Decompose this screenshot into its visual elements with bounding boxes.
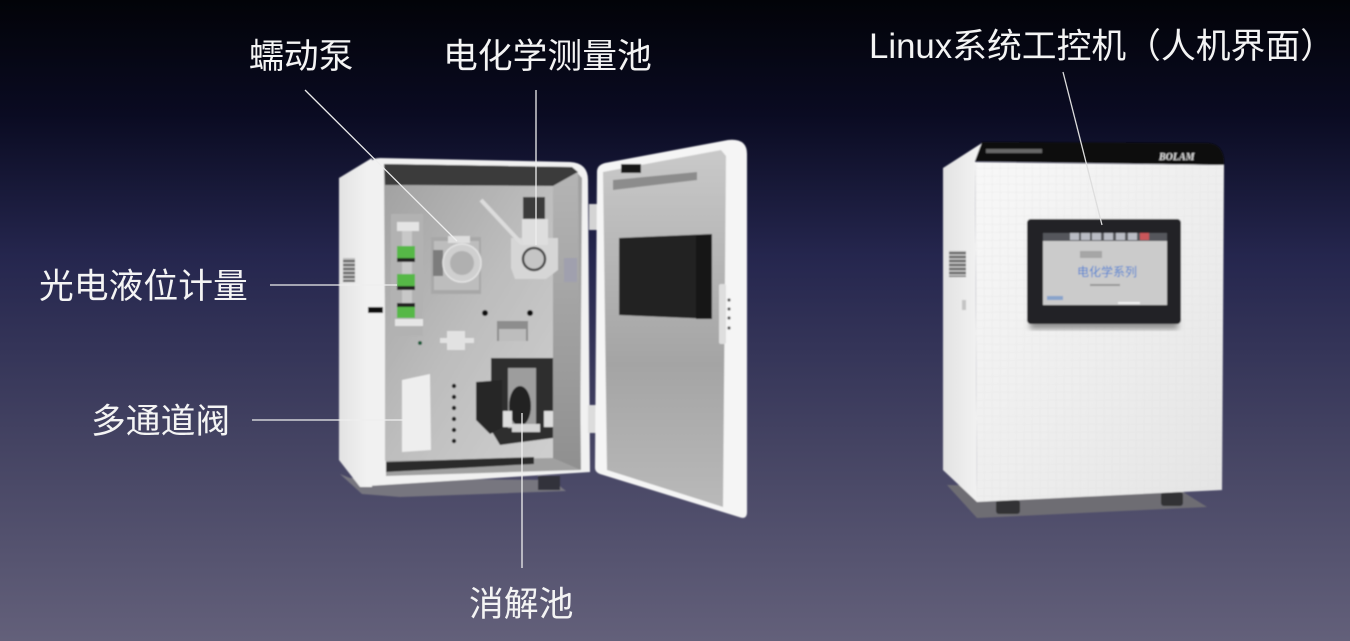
open cabinet	[339, 140, 747, 518]
label: level sensor: 光电液位计量	[39, 267, 248, 306]
cabinet interior	[384, 164, 582, 476]
green sensor 3	[397, 306, 415, 318]
leader lines	[252, 72, 1102, 568]
door latch	[621, 164, 641, 173]
closed feet	[996, 500, 1020, 514]
model text	[986, 149, 1042, 153]
level sensor column	[391, 214, 423, 336]
valve holes	[452, 384, 456, 443]
front grid texture	[975, 162, 1224, 502]
small block	[447, 331, 465, 350]
green sensor 1	[397, 246, 415, 259]
green sensor 2	[397, 274, 415, 287]
label: multi-channel valve: 多通道阀	[91, 402, 230, 441]
cabinet side panel	[339, 158, 372, 487]
touch screen	[1027, 219, 1181, 324]
rectangular cutout	[497, 321, 528, 341]
open door	[595, 140, 747, 518]
closed front panel	[975, 162, 1224, 502]
screen display	[1043, 233, 1167, 305]
door inner panel	[603, 150, 726, 507]
closed side panel	[943, 143, 982, 502]
closed latch	[962, 300, 966, 310]
screen title: 电化学系列	[1077, 264, 1137, 279]
door black box	[619, 234, 712, 319]
cabinet feet	[538, 476, 560, 490]
label: digestion cell: 消解池	[469, 585, 573, 624]
door hinge strip	[719, 284, 726, 344]
screen toolbar	[1043, 233, 1167, 241]
interior top dark band	[384, 164, 578, 186]
digestion cell	[476, 358, 553, 445]
screen shadow	[1030, 320, 1178, 329]
peristaltic pump	[431, 236, 481, 294]
vent grille	[343, 258, 355, 282]
label: Linux industrial PC: Linux系统工控机（人机界面）	[869, 27, 1335, 66]
electrochemical cell	[481, 197, 558, 279]
bottom slot	[386, 457, 534, 472]
closed black top strip	[975, 142, 1224, 165]
plate holes	[482, 310, 488, 316]
logo: BOLAM	[1158, 152, 1196, 163]
hole pattern	[564, 258, 577, 282]
closed vent	[949, 251, 966, 277]
closed shadow	[947, 485, 1207, 518]
door hinges	[589, 204, 597, 230]
cabinet shadow	[340, 474, 566, 497]
label: electrochemical cell: 电化学测量池	[443, 37, 652, 76]
interior right wall	[553, 172, 581, 470]
latch	[368, 307, 383, 313]
back plate	[385, 185, 553, 461]
closed cabinet	[943, 142, 1224, 518]
door bracket	[613, 172, 697, 190]
cabinet front frame	[368, 158, 590, 486]
screen small text	[1080, 251, 1102, 258]
label: peristaltic pump: 蠕动泵	[249, 37, 353, 76]
multi-channel valve	[402, 374, 431, 452]
